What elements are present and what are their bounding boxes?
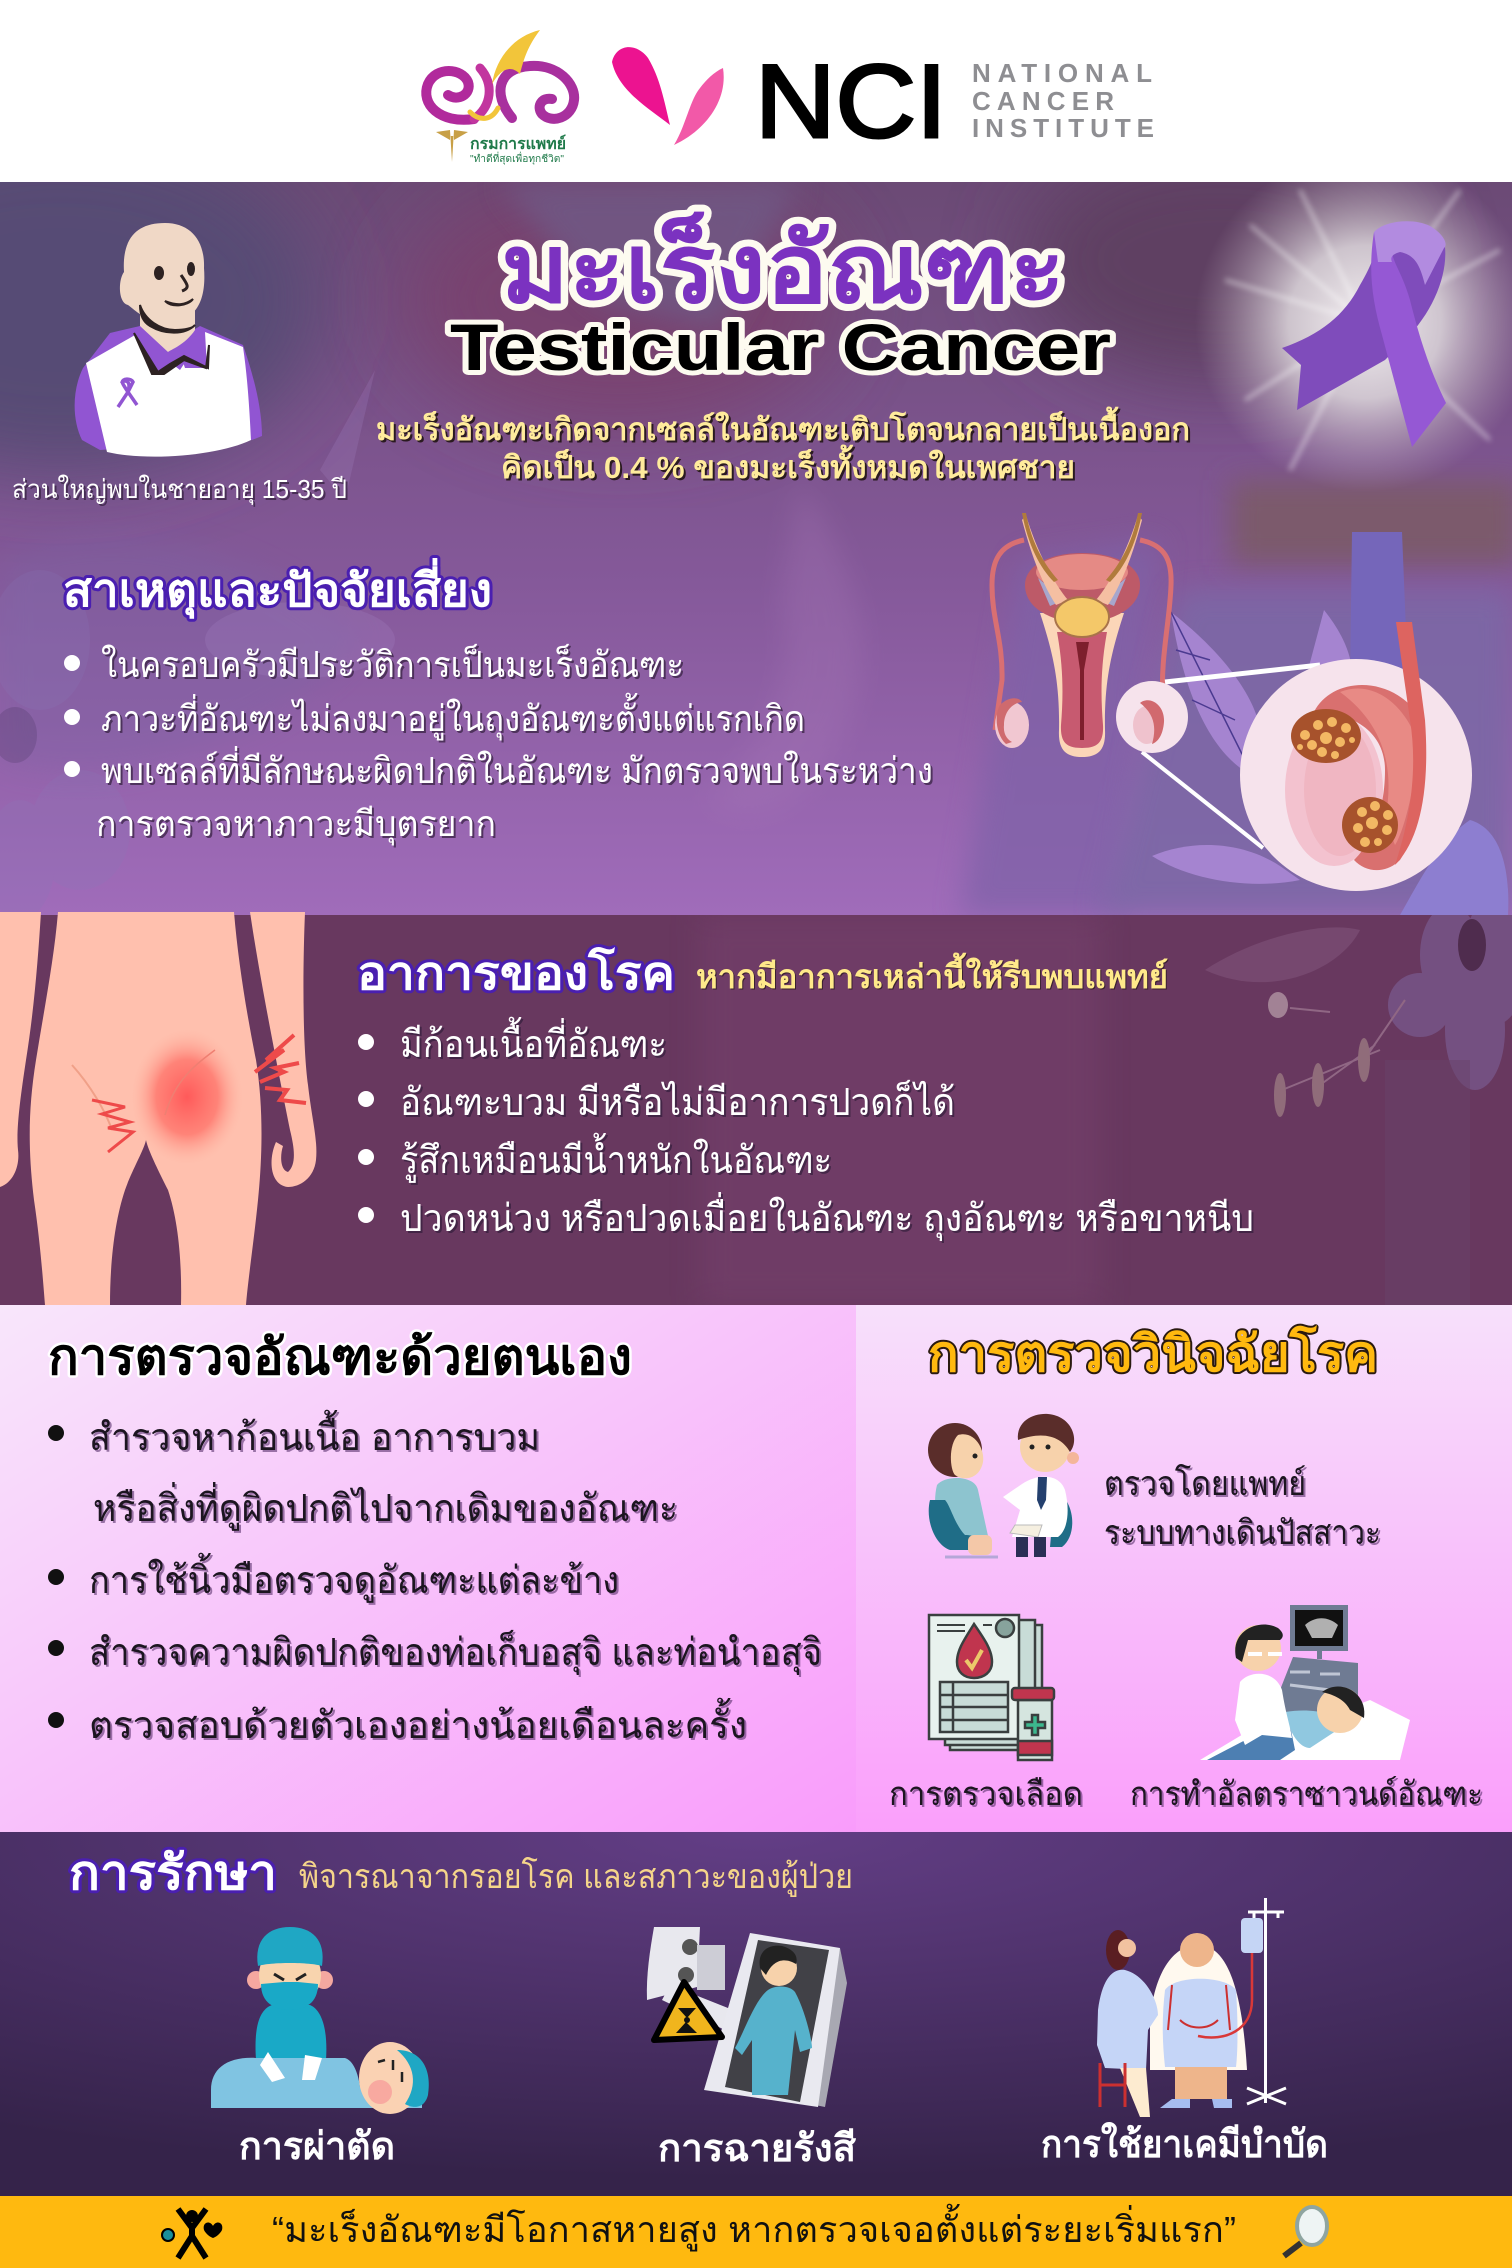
decorative leaves behind anatomy xyxy=(1152,532,1508,915)
list: self examination: สำรวจหาก้อนเนื้อ อาการบวม xyxy=(89,1409,540,1459)
callout: zoom lines and circles xyxy=(1116,622,1472,891)
label: chemotherapy: การใช้ยาเคมีบำบัด xyxy=(1041,2122,1328,2166)
heading: symptoms: อาการของโรค xyxy=(357,946,675,999)
list: causes: พบเซลล์ที่มีลักษณะผิดปกติในอัณฑะ มักตรวจพบในระหว่าง xyxy=(101,746,933,791)
list: symptoms xyxy=(358,1016,1254,1241)
heading: self examination: การตรวจอัณฑะด้วยตนเอง xyxy=(48,1329,632,1385)
subheading: see a doctor: หากมีอาการเหล่านี้ให้รีบพบแพทย์ xyxy=(696,952,1168,995)
decorative flower left xyxy=(0,372,395,763)
list: symptoms: ปวดหน่วง หรือปวดเมื่อยในอัณฑะ ถุงอัณฑะ หรือขาหนีบ xyxy=(400,1192,1254,1241)
subheading: consideration: พิจารณาจากรอยโรค และสภาวะของผู้ป่วย xyxy=(299,1857,853,1897)
list: symptoms: รู้สึกเหมือนมีน้ำหนักในอัณฑะ xyxy=(400,1132,832,1183)
list: self examination xyxy=(48,1409,822,1747)
intro text: คิดเป็น 0.4 % ของมะเร็งทั้งหมดในเพศชาย xyxy=(501,444,1075,485)
logo: department of medical services: กรมการแพทย์ xyxy=(470,134,566,153)
caption: age range: ส่วนใหญ่พบในชายอายุ 15-35 ปี xyxy=(12,474,347,505)
title: English: Testicular Cancer xyxy=(450,310,1111,384)
caduceus emblem xyxy=(436,130,468,162)
list: causes: ภาวะที่อัณฑะไม่ลงมาอยู่ในถุงอัณฑะตั้งแต่แรกเกิด xyxy=(101,692,805,741)
icon: surgeon xyxy=(211,1927,429,2114)
panel: diagnosis xyxy=(856,1305,1512,1832)
label: ultrasound: การทำอัลตราซาวนด์อัณฑะ xyxy=(1130,1775,1483,1812)
text: doctor exam: ตรวจโดยแพทย์ xyxy=(1104,1464,1306,1503)
logo: NCI wordmark: INSTITUTE xyxy=(972,113,1154,143)
intro text: มะเร็งอัณฑะเกิดจากเซลล์ในอัณฑะเติบโตจนกลายเป็นเนื้องอก xyxy=(376,406,1190,447)
list: self examination: สำรวจความผิดปกติของท่อเก็บอสุจิ และท่อนำอสุจิ xyxy=(89,1629,822,1675)
list: causes xyxy=(64,642,933,846)
list: self examination: ตรวจสอบด้วยตัวเองอย่างน้อยเดือนละครั้ง xyxy=(89,1697,747,1747)
label: blood test: การตรวจเลือด xyxy=(889,1775,1083,1812)
list: symptoms: มีก้อนเนื้อที่อัณฑะ xyxy=(400,1016,667,1066)
logo: NCI butterfly xyxy=(612,47,724,145)
illustration: male reproductive anatomy xyxy=(992,513,1171,757)
panel: symptoms background xyxy=(0,895,1512,1305)
heading: causes and risks: สาเหตุและปัจจัยเสี่ยง xyxy=(63,558,492,619)
icon: tumour clusters xyxy=(1291,709,1398,853)
intro text xyxy=(376,406,1190,485)
icon: ultrasound xyxy=(1200,1605,1410,1760)
character: bald man with ribbon xyxy=(75,223,262,457)
heading: treatment: การรักษา xyxy=(69,1847,277,1900)
label: radiation: การฉายรังสี xyxy=(658,2128,857,2170)
text: doctor exam: ระบบทางเดินปัสสาวะ xyxy=(1104,1514,1381,1552)
panel: hero and causes background xyxy=(0,130,1512,920)
panel: footer banner xyxy=(0,2196,1512,2268)
icon: active person xyxy=(162,2209,222,2258)
logo: NCI wordmark: CANCER xyxy=(972,86,1114,116)
icon: purple ribbon xyxy=(1282,221,1446,447)
decorative flower right xyxy=(1206,915,1512,1117)
panel: treatment xyxy=(0,1832,1512,2196)
list: symptoms: อัณฑะบวม มีหรือไม่มีอาการปวดก็ได้ xyxy=(400,1079,955,1124)
list: causes: ในครอบครัวมีประวัติการเป็นมะเร็งอัณฑะ xyxy=(101,642,684,685)
label: surgery: การผ่าตัด xyxy=(239,2126,395,2168)
header band xyxy=(0,0,1512,182)
list: self examination: หรือสิ่งที่ดูผิดปกติไปจากเดิมของอัณฑะ xyxy=(93,1482,678,1531)
panel: self examination xyxy=(0,1305,856,1832)
burst behind ribbon xyxy=(1203,182,1512,482)
quote: “มะเร็งอัณฑะมีโอกาสหายสูง หากตรวจเจอตั้งแต่ระยะเริ่มแรก” xyxy=(272,2203,1236,2252)
heading: diagnosis: การตรวจวินิจฉัยโรค xyxy=(928,1324,1378,1382)
logo: department of medical services: "ทำดีที่สุดเพื่อทุกชีวิต" xyxy=(470,151,564,165)
logo: NCI wordmark xyxy=(755,44,1154,160)
list: causes: การตรวจหาภาวะมีบุตรยาก xyxy=(96,803,496,846)
illustration: lower body with pain xyxy=(0,912,316,1305)
logo: NCI wordmark: NCI xyxy=(755,44,947,160)
list: self examination: การใช้นิ้วมือตรวจดูอัณฑะแต่ละข้าง xyxy=(89,1552,619,1603)
text: doctor exam xyxy=(1104,1464,1381,1552)
logo: department of medical services xyxy=(426,30,574,165)
icon: chemotherapy xyxy=(1097,1898,1286,2117)
logo: NCI wordmark: NATIONAL xyxy=(972,58,1152,88)
title: Thai: มะเร็งอัณฑะ xyxy=(501,211,1065,323)
icon: doctor and patient xyxy=(928,1414,1079,1557)
icon: magnifier xyxy=(1284,2207,1327,2256)
icon: radiation machine xyxy=(647,1927,847,2107)
icon: blood test report xyxy=(929,1615,1054,1760)
